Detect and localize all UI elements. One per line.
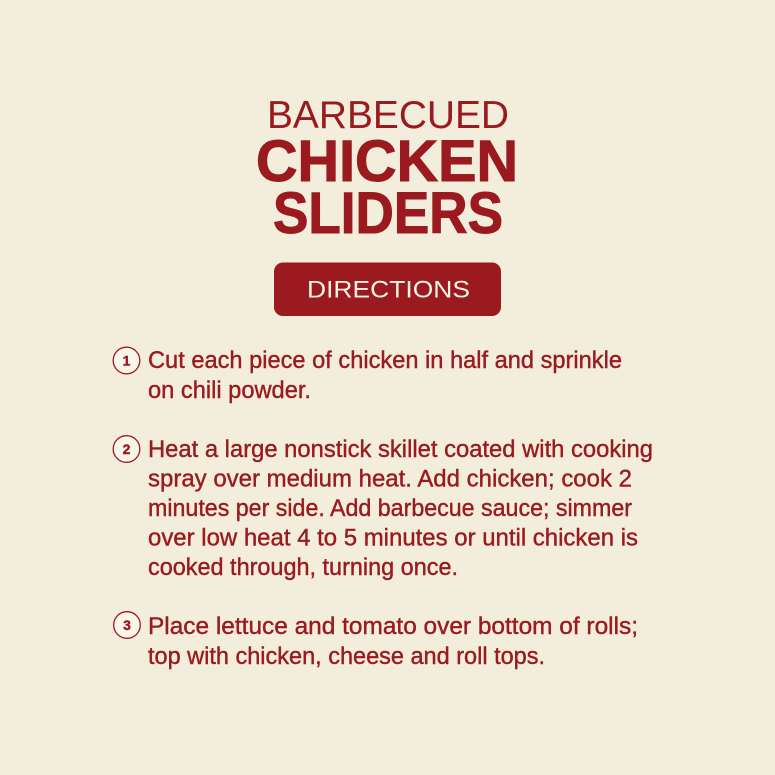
number badge 2 (113, 436, 140, 462)
number badge 1: 1 (123, 352, 131, 368)
step 2 text: minutes per side. Add barbecue sauce; simmer (148, 495, 632, 522)
step 1 text: Cut each piece of chicken in half and sprinkle (148, 347, 622, 374)
step 3 text: Place lettuce and tomato over bottom of rolls; (148, 613, 638, 640)
directions badge (274, 262, 501, 316)
step 3 (114, 612, 638, 670)
number badge 2: 2 (123, 441, 131, 457)
directions badge: DIRECTIONS (307, 276, 470, 304)
number badge 3: 3 (123, 617, 131, 633)
step 2 text: Heat a large nonstick skillet coated with cooking (148, 436, 653, 463)
step 2 text (148, 436, 653, 581)
number badge 1 (113, 347, 140, 374)
title: BARBECUED (267, 94, 509, 137)
title: SLIDERS (273, 181, 503, 246)
step 2 text: over low heat 4 to 5 minutes or until chicken is (148, 524, 638, 552)
step 3 text: top with chicken, cheese and roll tops. (148, 643, 545, 670)
title: CHICKEN (256, 129, 518, 194)
step 2 text: cooked through, turning once. (148, 554, 458, 581)
step 2 text: spray over medium heat. Add chicken; cook 2 (148, 466, 632, 492)
title (256, 94, 518, 246)
step 3 text (148, 613, 638, 670)
step 1 (113, 347, 622, 404)
step 1 text (148, 347, 622, 404)
step 1 text: on chili powder. (148, 377, 311, 404)
step 2 (113, 436, 653, 581)
number badge 3 (114, 612, 140, 638)
